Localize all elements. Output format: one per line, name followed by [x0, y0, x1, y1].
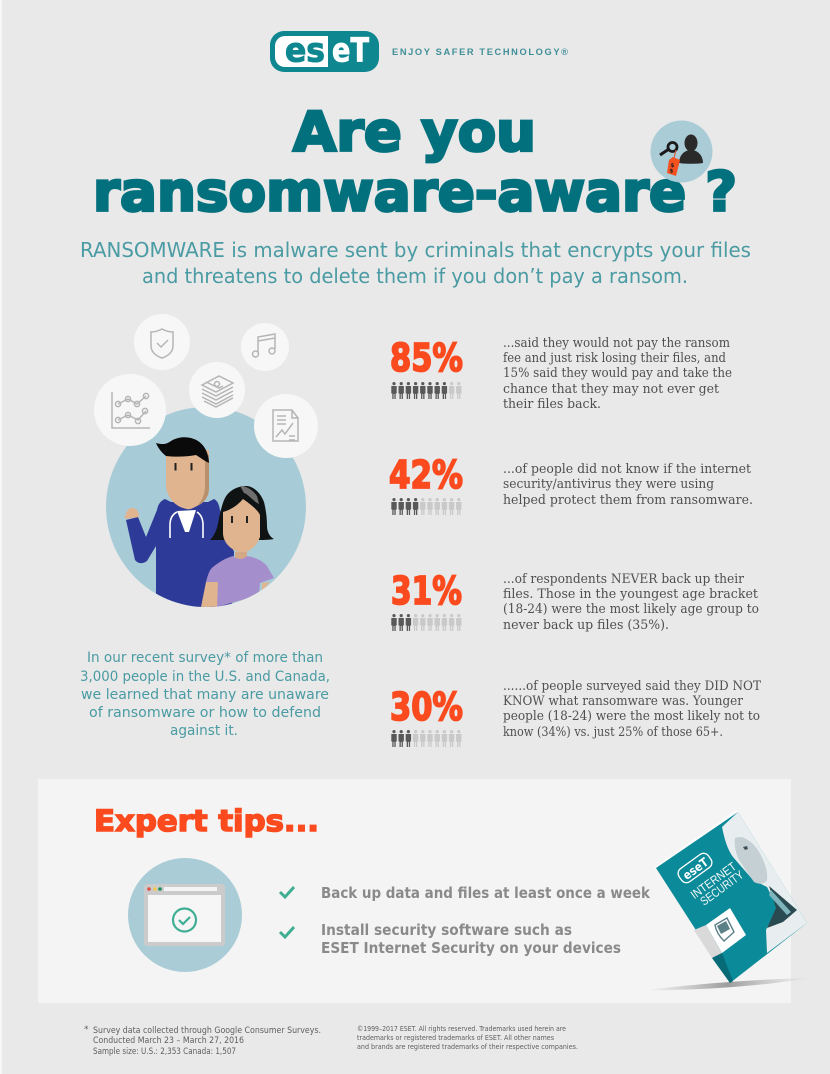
footnote: survey — [84, 1025, 321, 1057]
logo: ESET — [270, 30, 379, 72]
product box: ESET Internet Security — [645, 810, 810, 990]
text: fee and just risk losing their files, and — [503, 350, 726, 365]
icon: key, person and ransom tag: $ — [670, 163, 674, 169]
survey intro text: of ransomware or how to defend — [89, 705, 321, 721]
subtitle: and threatens to delete them if you don’t pay a ransom. — [142, 264, 688, 288]
icon: shield — [134, 314, 190, 370]
logo: ESET: eT — [332, 30, 369, 70]
title: ransomware-aware ? — [93, 160, 737, 224]
tip 2 — [321, 921, 621, 957]
text: files. Those in the youngest age bracket — [503, 586, 758, 601]
text: security/antivirus they were using — [503, 476, 714, 491]
woman — [201, 486, 274, 607]
footnote: survey: * — [84, 1025, 89, 1035]
people: 3 of 10 — [391, 730, 461, 747]
stat: 42%: 42% — [389, 453, 463, 497]
title — [93, 100, 737, 224]
check mark 2 — [280, 927, 294, 937]
people: 4 of 10 — [391, 498, 461, 515]
people: 3 of 10 — [391, 614, 461, 631]
icon: music — [241, 323, 289, 371]
text: ......of people surveyed said they DID NOT — [503, 678, 762, 693]
logo: ESET: es — [285, 30, 325, 70]
icon: line chart — [94, 374, 166, 446]
illustration: couple in circle with floating icons — [94, 314, 318, 612]
icon: money — [189, 362, 245, 418]
text: 15% said they would pay and take the — [503, 365, 732, 380]
footnote: survey: Conducted March 23 – March 27, 2016 — [93, 1036, 244, 1046]
tip 1: Back up data and files at least once a week — [321, 884, 651, 902]
title: Are you — [293, 100, 536, 164]
stat: 85% — [390, 335, 732, 411]
tip 2: Install security software such as — [321, 921, 572, 939]
text: ...said they would not pay the ransom — [503, 335, 730, 350]
check mark 1 — [280, 887, 294, 897]
icon: key, person and ransom tag — [650, 120, 712, 182]
survey intro text: we learned that many are unaware — [81, 687, 329, 703]
tip 2: ESET Internet Security on your devices — [321, 939, 621, 957]
stat: 85%: 85% — [390, 336, 463, 380]
footnote: copyright: ©1999–2017 ESET. All rights reserved. Trademarks used herein are — [357, 1025, 566, 1033]
survey intro text: 3,000 people in the U.S. and Canada, — [80, 669, 330, 685]
box label — [675, 841, 746, 911]
footnote: survey: Survey data collected through Google Consumer Surveys. — [93, 1026, 321, 1036]
heading: Expert tips... — [94, 804, 319, 838]
man — [125, 437, 234, 612]
text — [503, 335, 732, 411]
footnote: copyright: and brands are registered trademarks of their respective companies. — [357, 1043, 578, 1051]
subtitle: RANSOMWARE is malware sent by criminals that encrypts your files — [80, 238, 751, 262]
text: ...of people did not know if the internet — [503, 461, 751, 476]
panel: expert tips — [38, 779, 791, 1003]
survey intro text: against it. — [170, 723, 238, 739]
text: never back up files (35%). — [503, 617, 669, 632]
survey intro text: In our recent survey* of more than — [87, 650, 323, 666]
stat: 30% — [390, 678, 762, 747]
stat: 31% — [391, 569, 759, 632]
text: know (34%) vs. just 25% of those 65+. — [503, 724, 723, 739]
text: their files back. — [503, 396, 601, 411]
box label: eseT — [680, 854, 712, 883]
text: chance that they may not ever get — [503, 381, 719, 396]
survey intro text — [80, 650, 330, 739]
box label: SECURITY — [698, 868, 746, 908]
people: 8 of 10 — [391, 382, 461, 399]
footnote: copyright — [357, 1025, 578, 1051]
text: KNOW what ransomware was. Younger — [503, 693, 744, 708]
footnote: survey: Sample size: U.S.: 2,353 Canada: 1,507 — [93, 1047, 236, 1057]
text: people (18-24) were the most likely not to — [503, 708, 760, 723]
footnote: copyright: trademarks or registered trademarks of ESET. All other names — [357, 1034, 554, 1042]
subtitle — [80, 238, 751, 288]
text — [503, 461, 753, 507]
text: ...of respondents NEVER back up their — [503, 571, 745, 586]
icon: browser window with check — [128, 858, 242, 972]
stat: 42% — [389, 453, 753, 515]
text: helped protect them from ransomware. — [503, 492, 753, 507]
stat: 30%: 30% — [390, 685, 463, 729]
tagline: ENJOY SAFER TECHNOLOGY® — [392, 47, 568, 57]
text: (18-24) were the most likely age group to — [503, 601, 759, 616]
box label: INTERNET — [688, 859, 739, 902]
stat: 31%: 31% — [391, 569, 462, 613]
icon: document — [254, 394, 318, 458]
icon: key, person and ransom tag: $ — [670, 168, 674, 174]
text — [503, 678, 762, 739]
text — [503, 571, 759, 632]
